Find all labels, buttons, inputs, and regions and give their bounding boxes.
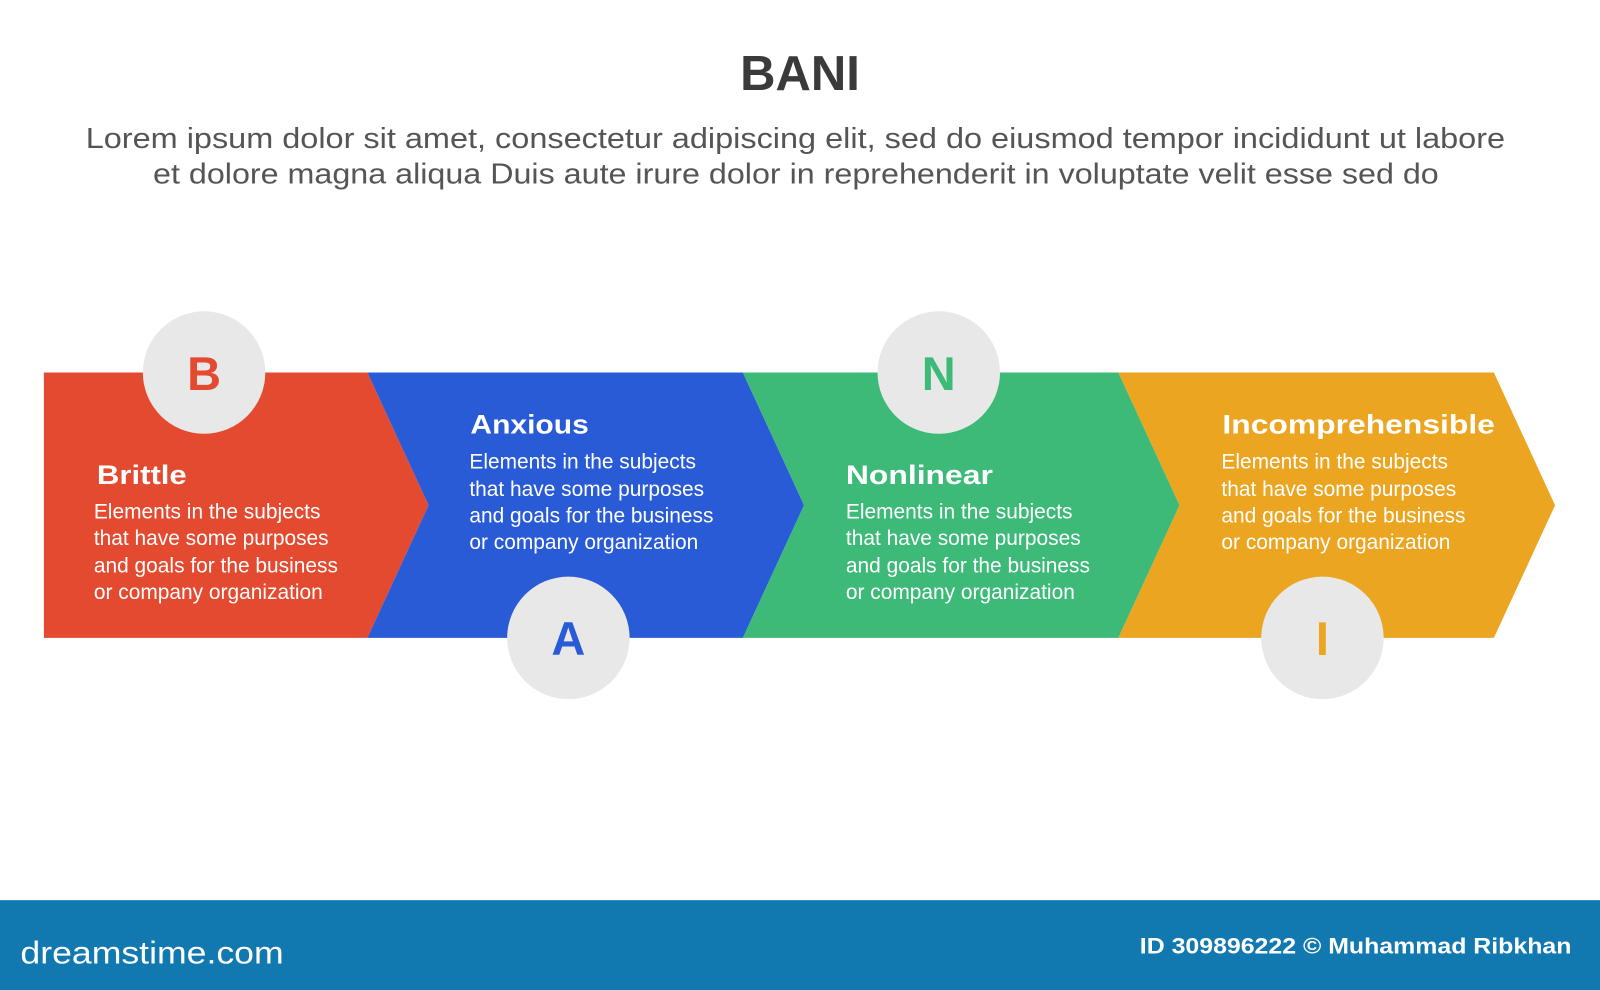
panel: brittle: Brittle (97, 460, 187, 490)
panel: incomprehensible (1118, 373, 1555, 638)
panel: incomprehensible: Elements in the subjects (1221, 450, 1448, 473)
icon: circle B (143, 311, 265, 434)
panel: brittle: or company organization (94, 581, 323, 604)
panel: brittle (44, 373, 429, 638)
panel: nonlinear: and goals for the business (846, 555, 1090, 578)
icon: circle I: I (1316, 613, 1329, 665)
panel: anxious: Elements in the subjects (469, 450, 696, 473)
footer: dreamstime.com (20, 934, 284, 970)
panel: incomprehensible: and goals for the business (1221, 505, 1465, 528)
icon: circle A (507, 577, 630, 699)
footer: ID 309896222 © Muhammad Ribkhan (1140, 933, 1571, 958)
icon: circle A: A (551, 613, 585, 665)
icon: circle B: B (187, 348, 221, 400)
subtitle (86, 123, 1505, 191)
panel: nonlinear: that have some purposes (846, 527, 1081, 550)
panel: anxious: that have some purposes (469, 478, 704, 501)
panel: incomprehensible: that have some purposes (1221, 478, 1456, 501)
panel: nonlinear (743, 373, 1180, 638)
panel: brittle: and goals for the business (94, 555, 338, 578)
panel: brittle: that have some purposes (94, 527, 329, 550)
subtitle: et dolore magna aliqua Duis aute irure dolor in reprehenderit in voluptate velit esse sed do (153, 159, 1439, 191)
icon: circle N: N (922, 348, 956, 400)
title: BANI (740, 47, 860, 101)
panel: anxious: and goals for the business (469, 505, 713, 528)
panel: brittle: Elements in the subjects (94, 500, 320, 523)
footer (0, 900, 1600, 990)
panel: incomprehensible: or company organization (1221, 531, 1450, 554)
panel: anxious: Anxious (470, 410, 589, 440)
panel: nonlinear: Nonlinear (846, 460, 993, 490)
icon: circle N (878, 311, 1000, 434)
panel: anxious: or company organization (469, 531, 698, 554)
panel: nonlinear: Elements in the subjects (846, 500, 1073, 523)
subtitle: Lorem ipsum dolor sit amet, consectetur adipiscing elit, sed do eiusmod tempor incididunt ut labore (86, 123, 1505, 155)
panel: nonlinear: or company organization (846, 581, 1075, 604)
panel: anxious (367, 373, 804, 638)
icon: circle I (1261, 577, 1384, 699)
panel: incomprehensible: Incomprehensible (1222, 410, 1495, 440)
